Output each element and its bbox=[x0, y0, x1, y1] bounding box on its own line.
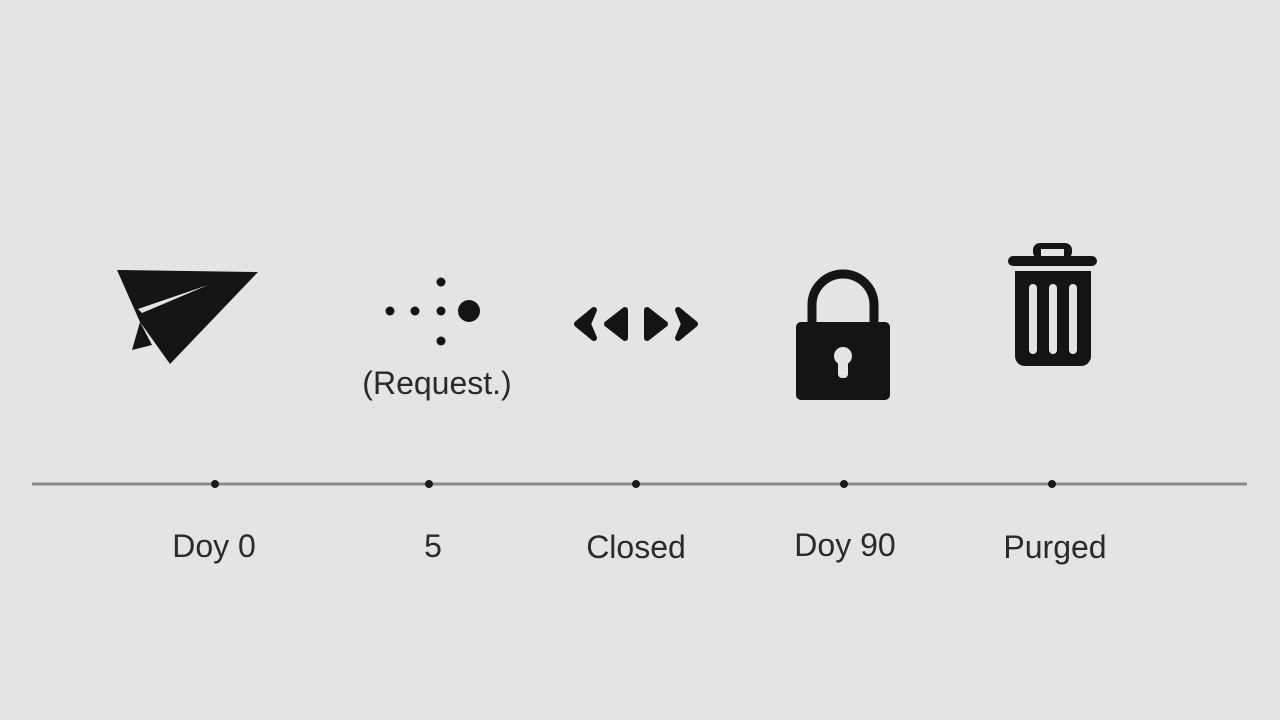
icon: paper plane bbox=[117, 270, 258, 364]
icon: trash can bbox=[1008, 243, 1097, 366]
timeline labels: Doy 0 bbox=[172, 528, 256, 564]
timeline labels bbox=[172, 527, 1107, 565]
icon: chevrons bbox=[577, 310, 695, 338]
timeline bbox=[32, 480, 1247, 488]
timeline labels: Closed bbox=[586, 529, 686, 565]
icon: dots arrow bbox=[386, 278, 480, 346]
timeline labels: Purged bbox=[1003, 529, 1107, 565]
icon: lock bbox=[796, 274, 890, 400]
timeline labels: 5 bbox=[424, 528, 442, 564]
text: request: (Request.) bbox=[362, 365, 512, 401]
timeline labels: Doy 90 bbox=[794, 527, 896, 563]
